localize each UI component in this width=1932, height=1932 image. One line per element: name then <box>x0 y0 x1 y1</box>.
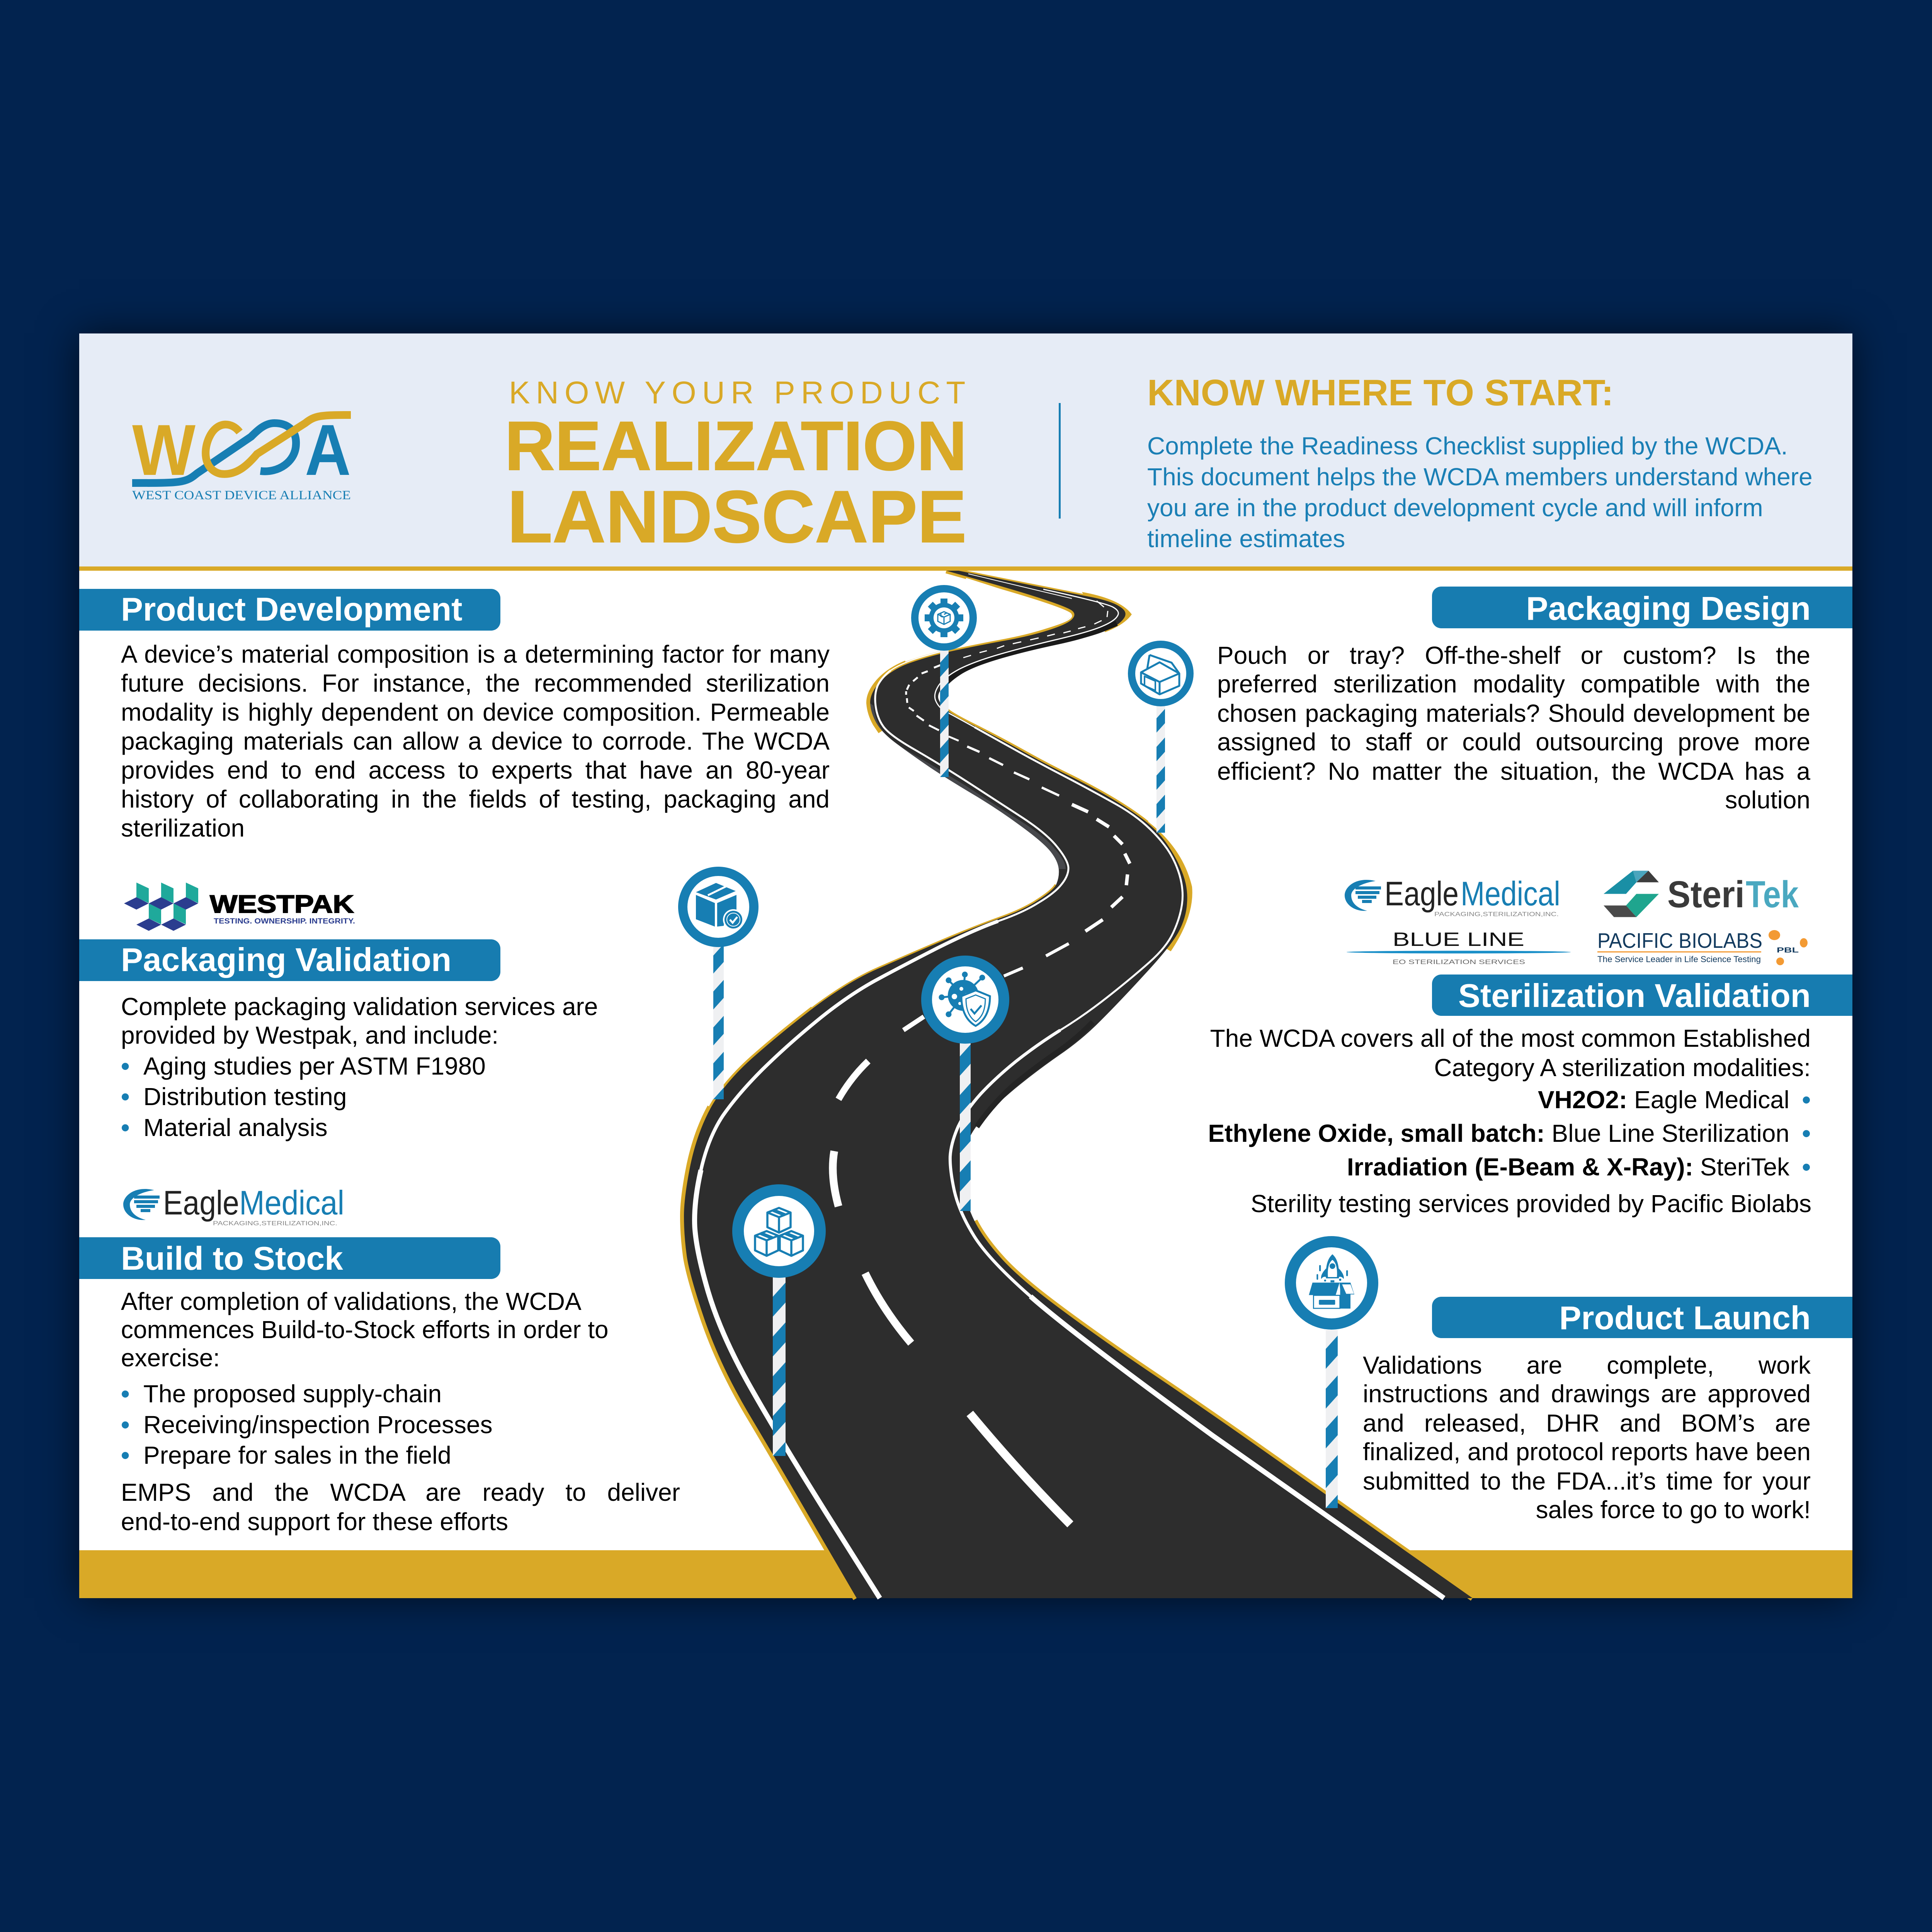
logo: Pacific Biolabs: The Service Leader in Life Science Testing <box>1597 954 1761 964</box>
text: Product Launch: submitted to the FDA...it’s time for your <box>1363 1467 1811 1495</box>
start paragraph <box>1147 430 1827 554</box>
signpost: product launch (rocket in box) <box>1285 1236 1378 1508</box>
text: Build to Stock: Prepare for sales in the field <box>143 1441 451 1469</box>
text: Packaging Validation: Aging studies per ASTM F1980 <box>143 1052 486 1080</box>
signpost: packaging validation (box with check) <box>678 867 759 1099</box>
heading: Build to Stock: Build to Stock <box>121 1240 343 1277</box>
title line one: REALIZATION <box>505 407 967 485</box>
text: Build to Stock <box>121 1286 680 1537</box>
logo: Eagle Medical (left) <box>123 1184 344 1227</box>
text: Product Development: modality is highly dependent on device composition. Permeable <box>121 698 830 726</box>
text: Sterilization Validation: Irradiation (E-Beam & X-Ray): SteriTek <box>1347 1153 1789 1181</box>
heading: Sterilization Validation: Sterilization Validation <box>1458 978 1811 1014</box>
text: Sterilization Validation: • <box>1802 1086 1811 1114</box>
text: Product Development: packaging materials can allow a device to corrode. The WCDA <box>121 727 830 755</box>
logo: Eagle Medical (right): Eagle <box>1384 874 1459 913</box>
text: Product Launch <box>1363 1350 1811 1525</box>
text: Build to Stock: exercise: <box>121 1344 220 1372</box>
heading: Packaging Validation <box>79 939 500 981</box>
text: Sterilization Validation: • <box>1802 1119 1811 1147</box>
text: Product Launch: Validations are complete, work <box>1363 1351 1811 1379</box>
text: Product Development: A device’s material composition is a determining factor for many <box>121 640 830 668</box>
heading: Packaging Design: Packaging Design <box>1526 590 1811 627</box>
text: Product Development: future decisions. For instance, the recommended sterilization <box>121 669 830 697</box>
text: Sterilization Validation: Category A sterilization modalities: <box>1434 1054 1811 1082</box>
text: Sterilization Validation: Ethylene Oxide, small batch: Blue Line Sterilization <box>1208 1119 1789 1147</box>
logo: Eagle Medical (left): PACKAGING,STERILIZATION,INC. <box>213 1220 337 1227</box>
start paragraph: you are in the product development cycle and will inform <box>1147 494 1763 522</box>
gold footer band <box>79 1550 1852 1598</box>
text: Packaging Validation: Material analysis <box>143 1114 328 1141</box>
text: Packaging Design: solution <box>1725 786 1810 814</box>
header band <box>79 333 1852 566</box>
start paragraph: Complete the Readiness Checklist supplied by the WCDA. <box>1147 432 1788 460</box>
text: Product Launch: and released, DHR and BOM’s are <box>1363 1409 1811 1437</box>
logo: Eagle Medical (right) <box>1345 874 1560 918</box>
text: Packaging Design: chosen packaging materials? Should development be <box>1217 699 1810 727</box>
logo: Pacific Biolabs: PACIFIC BIOLABS <box>1597 929 1762 952</box>
logo: WCDA <box>132 410 351 502</box>
text: Product Launch: finalized, and protocol reports have been <box>1363 1438 1811 1466</box>
text: Packaging Validation: Complete packaging validation services are <box>121 993 598 1020</box>
heading: Product Launch <box>1432 1297 1852 1338</box>
title kicker: KNOW YOUR PRODUCT <box>509 375 971 410</box>
logo: Eagle Medical (left): Eagle <box>163 1184 239 1222</box>
heading: Product Launch: Product Launch <box>1559 1300 1811 1337</box>
know where to start block <box>1147 372 1827 557</box>
text: Packaging Validation: provided by Westpak, and include: <box>121 1021 498 1049</box>
text: Product Development: provides end to end access to experts that have an 80-year <box>121 756 830 784</box>
logo: Westpak: WESTPAK <box>210 890 354 918</box>
logo: Eagle Medical (right): PACKAGING,STERILIZATION,INC. <box>1434 911 1559 918</box>
signpost: packaging design (open box) <box>1128 641 1194 833</box>
text: Product Launch: instructions and drawings are approved <box>1363 1380 1811 1408</box>
text: Sterilization Validation <box>1206 1023 1811 1219</box>
signpost: build to stock (stacked boxes) <box>732 1184 826 1456</box>
logo: WCDA: W <box>132 410 196 490</box>
logo: Blue Line <box>1347 929 1571 966</box>
text: Packaging Design: preferred sterilization modality compatible with the <box>1217 670 1810 698</box>
text: Product Development <box>121 639 830 844</box>
text: Build to Stock: The proposed supply-chain <box>143 1380 442 1408</box>
logo: Pacific Biolabs: PBL <box>1777 946 1799 954</box>
text: Packaging Validation <box>121 991 623 1143</box>
text: Build to Stock: After completion of validations, the WCDA <box>121 1287 582 1315</box>
heading: Packaging Design <box>1432 587 1852 628</box>
start paragraph: This document helps the WCDA members understand where <box>1147 463 1813 491</box>
logo: Eagle Medical (left): Medical <box>239 1184 344 1222</box>
text: Sterilization Validation: The WCDA covers all of the most common Established <box>1210 1024 1811 1052</box>
text: Packaging Design: assigned to staff or could outsourcing prove more <box>1217 728 1810 756</box>
text: Packaging Validation: • <box>121 1052 129 1080</box>
logo: SteriTek <box>1604 871 1799 917</box>
logo: SteriTek: Steri <box>1667 873 1745 915</box>
text: Product Development: history of collaborating in the fields of testing, packaging and <box>121 785 830 813</box>
text: Build to Stock: • <box>121 1441 129 1469</box>
text: Build to Stock: end-to-end support for these efforts <box>121 1508 508 1536</box>
logo: Blue Line: EO STERILIZATION SERVICES <box>1393 958 1525 966</box>
title line two: LANDSCAPE <box>507 476 967 558</box>
text: Sterilization Validation: Sterility testing services provided by Pacific Biolabs <box>1251 1190 1811 1218</box>
gold header rule <box>79 566 1852 571</box>
heading: Product Development: Product Development <box>121 591 463 628</box>
text: Packaging Design: Pouch or tray? Off-the-shelf or custom? Is the <box>1217 641 1810 669</box>
logo: WCDA: A <box>305 410 351 490</box>
text: Packaging Validation: Distribution testing <box>143 1083 347 1111</box>
text: Packaging Validation: • <box>121 1083 129 1111</box>
text: Build to Stock: • <box>121 1380 129 1408</box>
logo: Eagle Medical (right): Medical <box>1461 874 1560 913</box>
text: Build to Stock: Receiving/inspection Processes <box>143 1411 493 1439</box>
text: Packaging Design: efficient? No matter the situation, the WCDA has a <box>1217 757 1810 785</box>
logo: WCDA: WEST COAST DEVICE ALLIANCE <box>132 488 351 502</box>
text: Sterilization Validation: • <box>1802 1153 1811 1181</box>
text: Build to Stock: • <box>121 1411 129 1439</box>
logo: Westpak: TESTING. OWNERSHIP. INTEGRITY. <box>214 917 355 925</box>
text: Product Launch: sales force to go to work! <box>1536 1496 1811 1524</box>
text: Packaging Design <box>1217 640 1810 815</box>
title block <box>502 371 970 553</box>
poster card <box>79 333 1852 1598</box>
header divider <box>1059 403 1061 519</box>
text: Build to Stock: EMPS and the WCDA are ready to deliver <box>121 1478 680 1506</box>
signpost: product development (gear) <box>911 585 977 777</box>
start heading: KNOW WHERE TO START: <box>1147 372 1614 413</box>
logo: Pacific Biolabs <box>1597 929 1808 965</box>
heading: Packaging Validation: Packaging Validation <box>121 942 451 978</box>
text: Product Development: sterilization <box>121 814 245 842</box>
start paragraph: timeline estimates <box>1147 525 1345 553</box>
logo: Blue Line: BLUE LINE <box>1393 929 1524 950</box>
logo: SteriTek: Tek <box>1746 873 1799 915</box>
logo: Westpak <box>124 883 355 931</box>
text: Sterilization Validation: VH2O2: Eagle Medical <box>1538 1086 1789 1114</box>
heading: Build to Stock <box>79 1237 500 1279</box>
winding road <box>684 571 1473 1598</box>
signpost: sterilization validation (virus and shield) <box>921 956 1009 1211</box>
text: Build to Stock: commences Build-to-Stock efforts in order to <box>121 1316 609 1344</box>
text: Packaging Validation: • <box>121 1114 129 1141</box>
